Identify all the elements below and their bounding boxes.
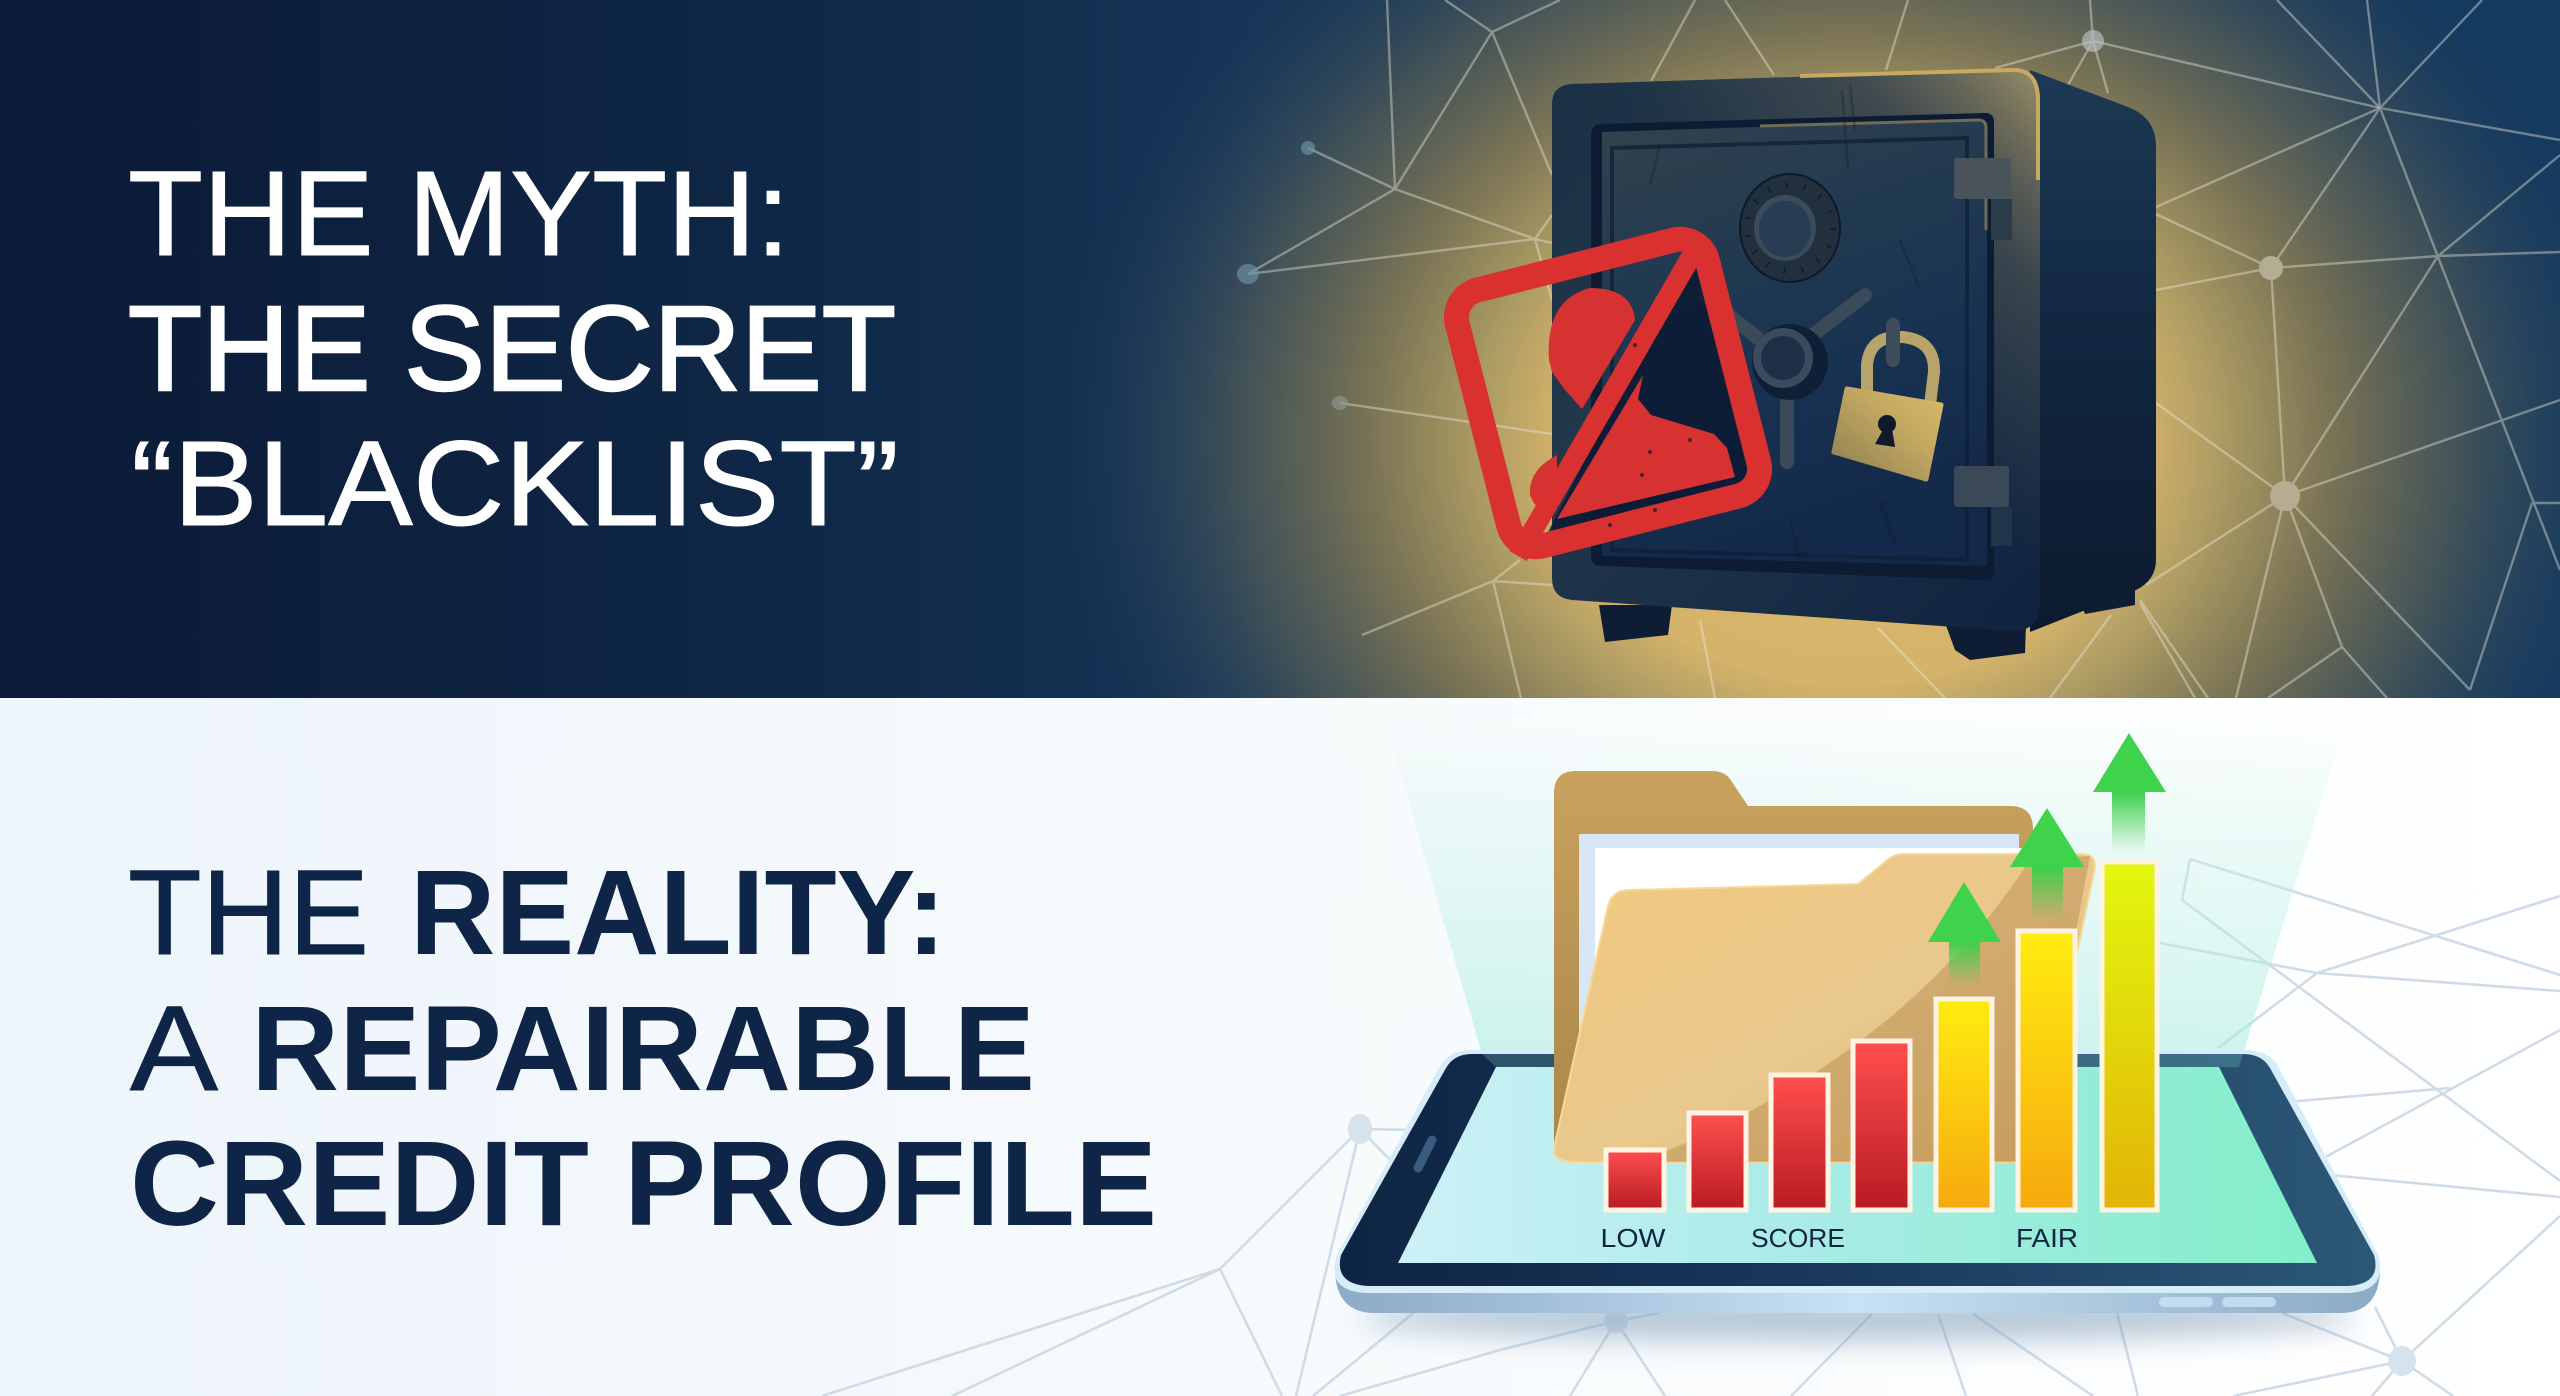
red stamp: blacklisted person [1450,233,1766,556]
beam tint on frame [1482,1054,2243,1067]
bar labels: SCORE [1751,1223,1845,1253]
reality background [0,698,2560,1396]
amber glow behind safe [1050,0,2560,700]
padlock [1834,325,1941,479]
tablet rim [1334,1050,2380,1293]
network lines: dark panel [1248,0,2560,698]
tablet shadow [1358,1294,2358,1342]
dial [1740,174,1840,282]
safe side [2030,70,2156,632]
light beam [1385,720,2346,1054]
heading: the myth: THE SECRET [128,280,896,416]
folder back [1554,771,2033,1162]
illustration: locked safe [1450,70,2156,660]
bar labels: FAIR [2016,1223,2078,1253]
myth background [0,0,2560,698]
stamp border and strike [1450,233,1766,553]
illustration: tablet with folder and score bars [1334,720,2380,1342]
door top highlight [1760,120,1986,230]
safe feet [1599,590,2135,660]
front highlight [1688,72,2040,500]
bar labels: LOW [1600,1223,1666,1253]
heading: the reality: PROFILE [624,1115,1157,1251]
bar labels [1600,1223,2078,1253]
folder front [1554,854,2095,1162]
handle [1703,295,1865,462]
heading: the reality: A [130,980,218,1116]
heading: the reality: REPAIRABLE [251,980,1035,1116]
heading: the reality: CREDIT [130,1115,589,1251]
folder papers [1579,834,2035,1134]
hinges [1954,158,2012,546]
heading: the reality [128,844,1157,1251]
panel: the myth [0,0,2560,700]
tablet speaker and buttons [1418,1140,2276,1307]
folder sheen [1640,856,2090,1162]
growth arrows [1928,733,2166,986]
heading: the reality: REALITY: [410,844,946,980]
network nodes: light panel [1348,1114,2416,1376]
safe front [1552,70,2040,631]
door inner line [1612,138,1967,560]
heading: the myth: “BLACKLIST” [131,415,899,551]
stamp wear [1608,343,1704,527]
tablet screen [1398,1067,2317,1263]
heading: the myth: THE MYTH: [128,145,790,281]
tablet frame [1340,1054,2376,1286]
gold rim [1800,70,2038,180]
person silhouette [1549,288,1635,409]
heading: the reality: THE [128,844,369,980]
network nodes: dark panel [1237,30,2300,511]
tablet base [1335,1262,2380,1313]
heading: the myth [130,171,895,526]
panel: the reality [0,698,2560,1396]
door outline [1591,113,1994,580]
stamp inner shadow [1540,245,1752,548]
scratches [1650,85,1920,560]
network lines: light panel [822,859,2560,1396]
door panel [1602,120,1987,566]
score bars [1606,862,2157,1210]
